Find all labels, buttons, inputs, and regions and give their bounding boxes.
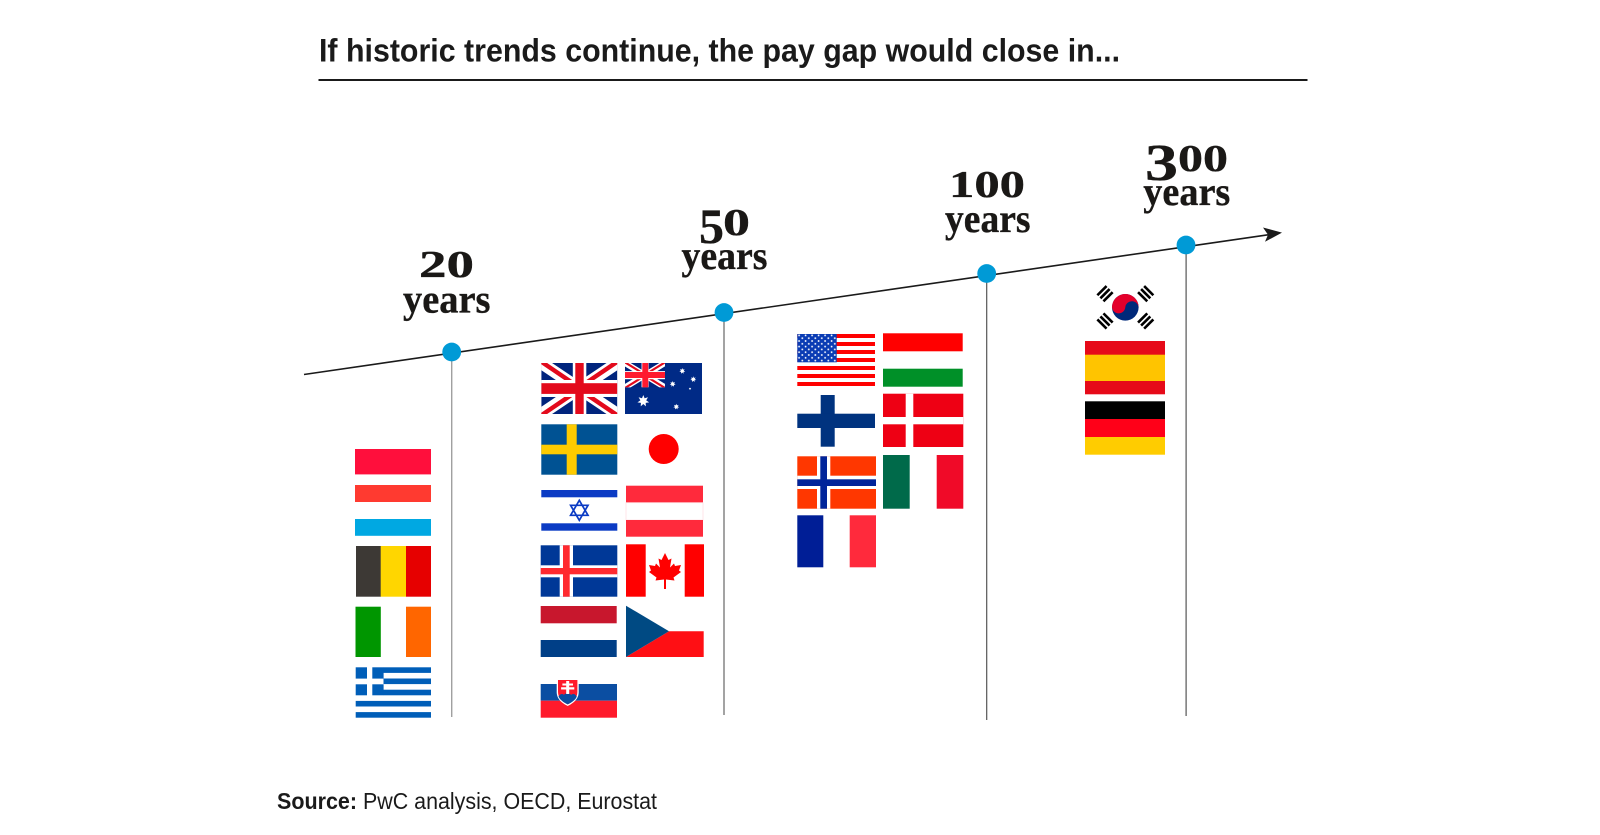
label: 300 years bbox=[1143, 135, 1230, 214]
flag: Czech Republic bbox=[626, 606, 704, 657]
flag: Denmark bbox=[883, 394, 963, 447]
label: 50 years: years bbox=[682, 233, 768, 278]
label: 100 years: 100 bbox=[949, 164, 1025, 206]
flag: Iceland bbox=[541, 545, 617, 597]
flag: United Kingdom bbox=[540, 361, 618, 416]
timeline arrow bbox=[304, 228, 1282, 374]
label: 300 years: 3 bbox=[1145, 135, 1178, 192]
label: 300 years: years bbox=[1143, 169, 1230, 214]
flags: 100 years group bbox=[797, 333, 963, 567]
flag: France bbox=[797, 515, 876, 567]
flag: South Korea bbox=[1096, 285, 1154, 330]
flags: 50 years group bbox=[540, 361, 704, 718]
source note: PwC analysis, OECD, Eurostat bbox=[363, 788, 658, 814]
label: 50 years bbox=[682, 198, 768, 278]
flag: Israel bbox=[541, 490, 617, 531]
title: If historic trends continue, the pay gap would close in... bbox=[319, 32, 1120, 68]
flag: Luxembourg bbox=[355, 485, 431, 536]
label: 20 years: years bbox=[403, 276, 490, 322]
label: 300 years: 00 bbox=[1178, 138, 1228, 180]
flag: Canada bbox=[626, 544, 704, 597]
label: 50 years: 5 bbox=[699, 198, 724, 254]
flag: Slovakia bbox=[541, 679, 617, 718]
flag: Finland bbox=[797, 395, 875, 447]
label: 20 years bbox=[403, 244, 490, 322]
flag: Australia bbox=[624, 362, 702, 414]
flag: United States bbox=[797, 334, 875, 386]
flag: Norway bbox=[797, 456, 876, 509]
flag: Greece bbox=[356, 667, 431, 718]
label: 20 years: 20 bbox=[419, 244, 474, 286]
flag: Belgium bbox=[356, 546, 431, 597]
marker: 300 years bbox=[1177, 236, 1195, 716]
flag: Italy bbox=[883, 455, 963, 509]
flag: Japan bbox=[649, 434, 679, 464]
flag: Hungary bbox=[883, 333, 963, 387]
flag: Germany bbox=[1085, 401, 1165, 455]
flag: Spain bbox=[1085, 341, 1165, 394]
marker: 50 years bbox=[715, 303, 733, 715]
flag: Poland bbox=[355, 449, 431, 474]
marker: 100 years bbox=[977, 264, 996, 720]
title rule bbox=[318, 79, 1308, 81]
flag: Netherlands bbox=[541, 606, 617, 657]
flag: Sweden bbox=[541, 424, 617, 475]
label: 50 years: 0 bbox=[723, 202, 750, 244]
label: 100 years bbox=[945, 164, 1030, 241]
marker: 20 years bbox=[442, 343, 461, 717]
flags: 20 years group bbox=[355, 449, 431, 718]
flags: 300 years group bbox=[1085, 285, 1165, 455]
flag: Austria bbox=[626, 486, 703, 537]
source note: Source: bbox=[277, 788, 357, 814]
label: 100 years: years bbox=[945, 196, 1030, 241]
flag: Ireland bbox=[356, 607, 431, 657]
